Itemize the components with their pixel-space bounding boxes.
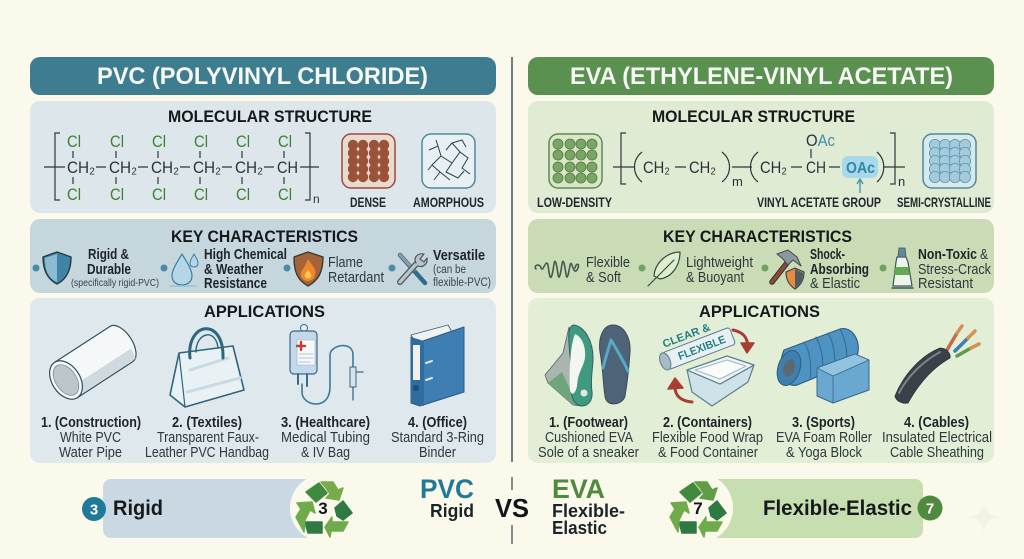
- icon: electrical cable: [895, 326, 979, 403]
- text: lightweight and buoyant: [686, 254, 754, 286]
- text: non-toxic and stress-crack resistant: Stress-Crack: [918, 261, 991, 278]
- badge: number 3: 3: [90, 502, 98, 518]
- icon: foam roller: [773, 329, 858, 389]
- panel: PVC key characteristics: [30, 219, 496, 293]
- text: non-toxic and stress-crack resistant: Resistant: [918, 275, 974, 292]
- label: EVA flexible-elastic: EVA: [552, 474, 605, 504]
- text: rigid and durable: [71, 246, 159, 289]
- text: high chemical and weather resistance: Resistance: [204, 275, 267, 292]
- caption: cables: Cable Sheathing: [890, 444, 984, 461]
- caption: cables: 4. (Cables): [904, 414, 969, 431]
- EVA chemical formula: n: [898, 174, 905, 189]
- bar: rigid: [103, 479, 318, 538]
- PVC chemical formula: Cl: [194, 132, 208, 151]
- PVC chemical formula: Cl: [110, 132, 124, 151]
- text: versatile: Versatile: [433, 247, 485, 264]
- text: flexible and soft: & Soft: [586, 269, 622, 286]
- text: flame retardant: [328, 254, 385, 286]
- text: flexible and soft: [586, 254, 630, 286]
- caption: healthcare: & IV Bag: [301, 444, 350, 461]
- label: EVA flexible-elastic: Flexible-: [552, 501, 625, 521]
- PVC chemical formula: Cl: [236, 185, 250, 204]
- label: PVC rigid: [420, 474, 474, 521]
- text: lightweight and buoyant: Lightweight: [686, 254, 754, 271]
- label: amorphous: AMORPHOUS: [413, 194, 484, 210]
- icon: sparkle watermark: [968, 500, 1000, 534]
- badge: number 7: [918, 496, 942, 520]
- caption: textiles: Transparent Faux-: [157, 429, 259, 446]
- caption: containers: [652, 414, 763, 461]
- PVC chemical formula: n: [313, 192, 320, 206]
- icon: recycling symbol 3: [296, 482, 352, 537]
- panel: central comparison: [420, 474, 625, 544]
- caption: textiles: 2. (Textiles): [172, 414, 242, 431]
- text: shock-absorbing and elastic: Absorbing: [810, 261, 869, 278]
- text: non-toxic and stress-crack resistant: [918, 246, 991, 292]
- panel: EVA applications: [528, 298, 994, 463]
- text: shock-absorbing and elastic: [810, 246, 869, 292]
- text: non-toxic and stress-crack resistant: Non-Toxic: [918, 246, 977, 263]
- PVC chemical formula: Cl: [67, 132, 81, 151]
- PVC title banner: [30, 57, 496, 95]
- label: flexible-elastic: Flexible-Elastic: [763, 497, 912, 520]
- icon: white PVC pipe: [43, 320, 142, 405]
- EVA chemical formula: CH₂: [689, 158, 716, 177]
- EVA chemical formula: CH₂: [760, 158, 787, 177]
- caption: sports: [776, 414, 872, 461]
- caption: healthcare: [281, 414, 370, 461]
- panel: footer EVA recycling code: [663, 473, 942, 543]
- PVC chemical formula: Cl: [278, 185, 292, 204]
- text: high chemical and weather resistance: High Chemical: [204, 246, 287, 263]
- text: flexible and soft: Flexible: [586, 254, 630, 271]
- PVC chemical formula: CH₂: [193, 158, 221, 177]
- EVA title banner: [528, 57, 994, 95]
- heading: molecular structure: MOLECULAR STRUCTURE: [168, 107, 372, 126]
- icon: flip-flop: [600, 325, 630, 404]
- text: non-toxic and stress-crack resistant: &: [980, 246, 988, 263]
- caption: footwear: 1. (Footwear): [549, 414, 628, 431]
- text: rigid and durable: Durable: [87, 261, 131, 278]
- icon: flame shield: [294, 252, 323, 286]
- caption: containers: 2. (Containers): [663, 414, 752, 431]
- icon: semi-crystalline structure: [923, 134, 976, 188]
- caption: office: 4. (Office): [408, 414, 467, 431]
- panel: PVC molecular structure: [30, 101, 496, 213]
- caption: textiles: [145, 414, 269, 461]
- label: EVA flexible-elastic: Elastic: [552, 518, 607, 538]
- PVC chemical formula: Cl: [110, 185, 124, 204]
- highlight: OAc group: OAc: [846, 160, 875, 177]
- label: PVC rigid: Rigid: [430, 501, 474, 521]
- icon: water drops: [170, 254, 198, 286]
- panel: EVA key characteristics: [528, 219, 994, 293]
- icon: yoga block: [817, 354, 869, 403]
- caption: construction: Water Pipe: [59, 444, 122, 461]
- icon: low-density structure: [549, 134, 602, 188]
- text: flame retardant: Retardant: [328, 269, 385, 286]
- icon: tube: [892, 248, 913, 288]
- caption: cables: [882, 414, 992, 461]
- text: shock-absorbing and elastic: & Elastic: [810, 275, 860, 292]
- caption: office: Standard 3-Ring: [391, 429, 484, 446]
- icon: amorphous structure: [422, 134, 475, 188]
- EVA title banner: EVA (ETHYLENE-VINYL ACETATE): [570, 63, 953, 90]
- icon: transparent handbag: [170, 329, 244, 407]
- PVC chemical formula: Cl: [278, 132, 292, 151]
- caption: footwear: Cushioned EVA: [545, 429, 633, 446]
- icon: food wrap roll: [653, 315, 736, 372]
- caption: footwear: Sole of a sneaker: [538, 444, 639, 461]
- heading: molecular structure: MOLECULAR STRUCTURE: [652, 107, 855, 126]
- caption: sports: & Yoga Block: [786, 444, 862, 461]
- highlight: OAc group: [842, 156, 878, 178]
- text: high chemical and weather resistance: & Weather: [204, 261, 263, 278]
- PVC chemical formula: Cl: [236, 132, 250, 151]
- badge: number 7: 7: [926, 500, 934, 518]
- icon: spring: [535, 261, 579, 277]
- text: high chemical and weather resistance: [204, 246, 287, 292]
- PVC chemical formula: Cl: [152, 132, 166, 151]
- panel: footer PVC recycling code: [82, 474, 358, 542]
- heading: applications: APPLICATIONS: [204, 302, 325, 321]
- caption: construction: 1. (Construction): [41, 414, 141, 431]
- PVC chemical formula: Cl: [152, 185, 166, 204]
- caption: sports: 3. (Sports): [792, 414, 855, 431]
- text: versatile: [433, 247, 491, 289]
- arrow: to vinyl acetate group: [857, 179, 863, 193]
- icon: feather: [648, 252, 680, 286]
- panel: EVA column: [528, 57, 994, 463]
- PVC chemical formula: Cl: [67, 185, 81, 204]
- EVA chemical formula: [613, 131, 905, 189]
- caption: textiles: Leather PVC Handbag: [145, 444, 269, 461]
- panel: EVA molecular structure: [528, 101, 994, 213]
- caption: healthcare: 3. (Healthcare): [281, 414, 370, 431]
- icon: sneaker sole: [545, 325, 593, 406]
- badge: number 3: [82, 497, 106, 521]
- caption: containers: & Food Container: [658, 444, 758, 461]
- icon: shield: [43, 252, 71, 284]
- PVC chemical formula: CH: [277, 158, 298, 177]
- EVA chemical formula: m: [732, 174, 743, 189]
- icon: IV bag with tubing: [290, 324, 363, 404]
- PVC chemical formula: [44, 132, 320, 206]
- icon: recycling symbol 7: [670, 482, 726, 537]
- icon: crossed tools: [400, 254, 427, 283]
- PVC chemical formula: CH₂: [67, 158, 95, 177]
- text: shock-absorbing and elastic: Shock-: [810, 246, 845, 263]
- icon: food wrap roll: FLEXIBLE: [677, 334, 727, 363]
- label: dense: DENSE: [350, 194, 386, 210]
- caption: sports: EVA Foam Roller: [776, 429, 872, 446]
- label: EVA flexible-elastic: [552, 474, 625, 538]
- panel: PVC applications: [30, 298, 496, 463]
- label: low-density: LOW-DENSITY: [537, 194, 613, 210]
- caption: containers: Flexible Food Wrap: [652, 429, 763, 446]
- label: PVC rigid: PVC: [420, 474, 474, 504]
- caption: office: [391, 414, 484, 461]
- icon: recycling symbol 7: 7: [693, 499, 703, 518]
- PVC chemical formula: CH₂: [109, 158, 137, 177]
- icon: blue ring binder: [411, 325, 464, 406]
- icon: red arrows: [668, 330, 754, 402]
- caption: construction: White PVC: [60, 429, 121, 446]
- caption: healthcare: Medical Tubing: [281, 429, 370, 446]
- icon: recycling symbol 3: 3: [318, 499, 328, 518]
- PVC title banner: PVC (POLYVINYL CHLORIDE): [97, 63, 428, 90]
- text: versatile: flexible-PVC): [433, 277, 491, 289]
- text: lightweight and buoyant: & Buoyant: [686, 269, 745, 286]
- caption: construction: [41, 414, 141, 461]
- EVA chemical formula: CH₂: [643, 158, 670, 177]
- PVC chemical formula: Cl: [194, 185, 208, 204]
- icon: food wrap roll: CLEAR &: [661, 321, 712, 351]
- label: VS: VS: [495, 493, 529, 523]
- PVC chemical formula: CH₂: [235, 158, 263, 177]
- panel: PVC column: [30, 57, 496, 463]
- bar: flexible-elastic: [700, 479, 923, 538]
- label: vinyl acetate group: VINYL ACETATE GROUP: [757, 194, 881, 210]
- caption: cables: Insulated Electrical: [882, 429, 992, 446]
- PVC chemical formula: CH₂: [151, 158, 179, 177]
- EVA chemical formula: OAc: [806, 131, 835, 150]
- icon: dense structure: [342, 134, 395, 188]
- text: rigid and durable: (specifically rigid-PVC): [71, 277, 159, 289]
- icon: hammer and shield: [772, 250, 804, 289]
- text: versatile: (can be: [433, 264, 466, 276]
- heading: key characteristics: KEY CHARACTERISTICS: [663, 227, 852, 246]
- caption: footwear: [538, 414, 639, 461]
- EVA chemical formula: CH: [806, 158, 826, 177]
- icon: food container: [687, 356, 754, 406]
- heading: applications: APPLICATIONS: [699, 302, 820, 321]
- heading: key characteristics: KEY CHARACTERISTICS: [171, 227, 358, 246]
- text: flame retardant: Flame: [328, 254, 363, 271]
- text: rigid and durable: Rigid &: [88, 246, 129, 263]
- caption: office: Binder: [419, 444, 456, 461]
- label: rigid: Rigid: [113, 497, 163, 520]
